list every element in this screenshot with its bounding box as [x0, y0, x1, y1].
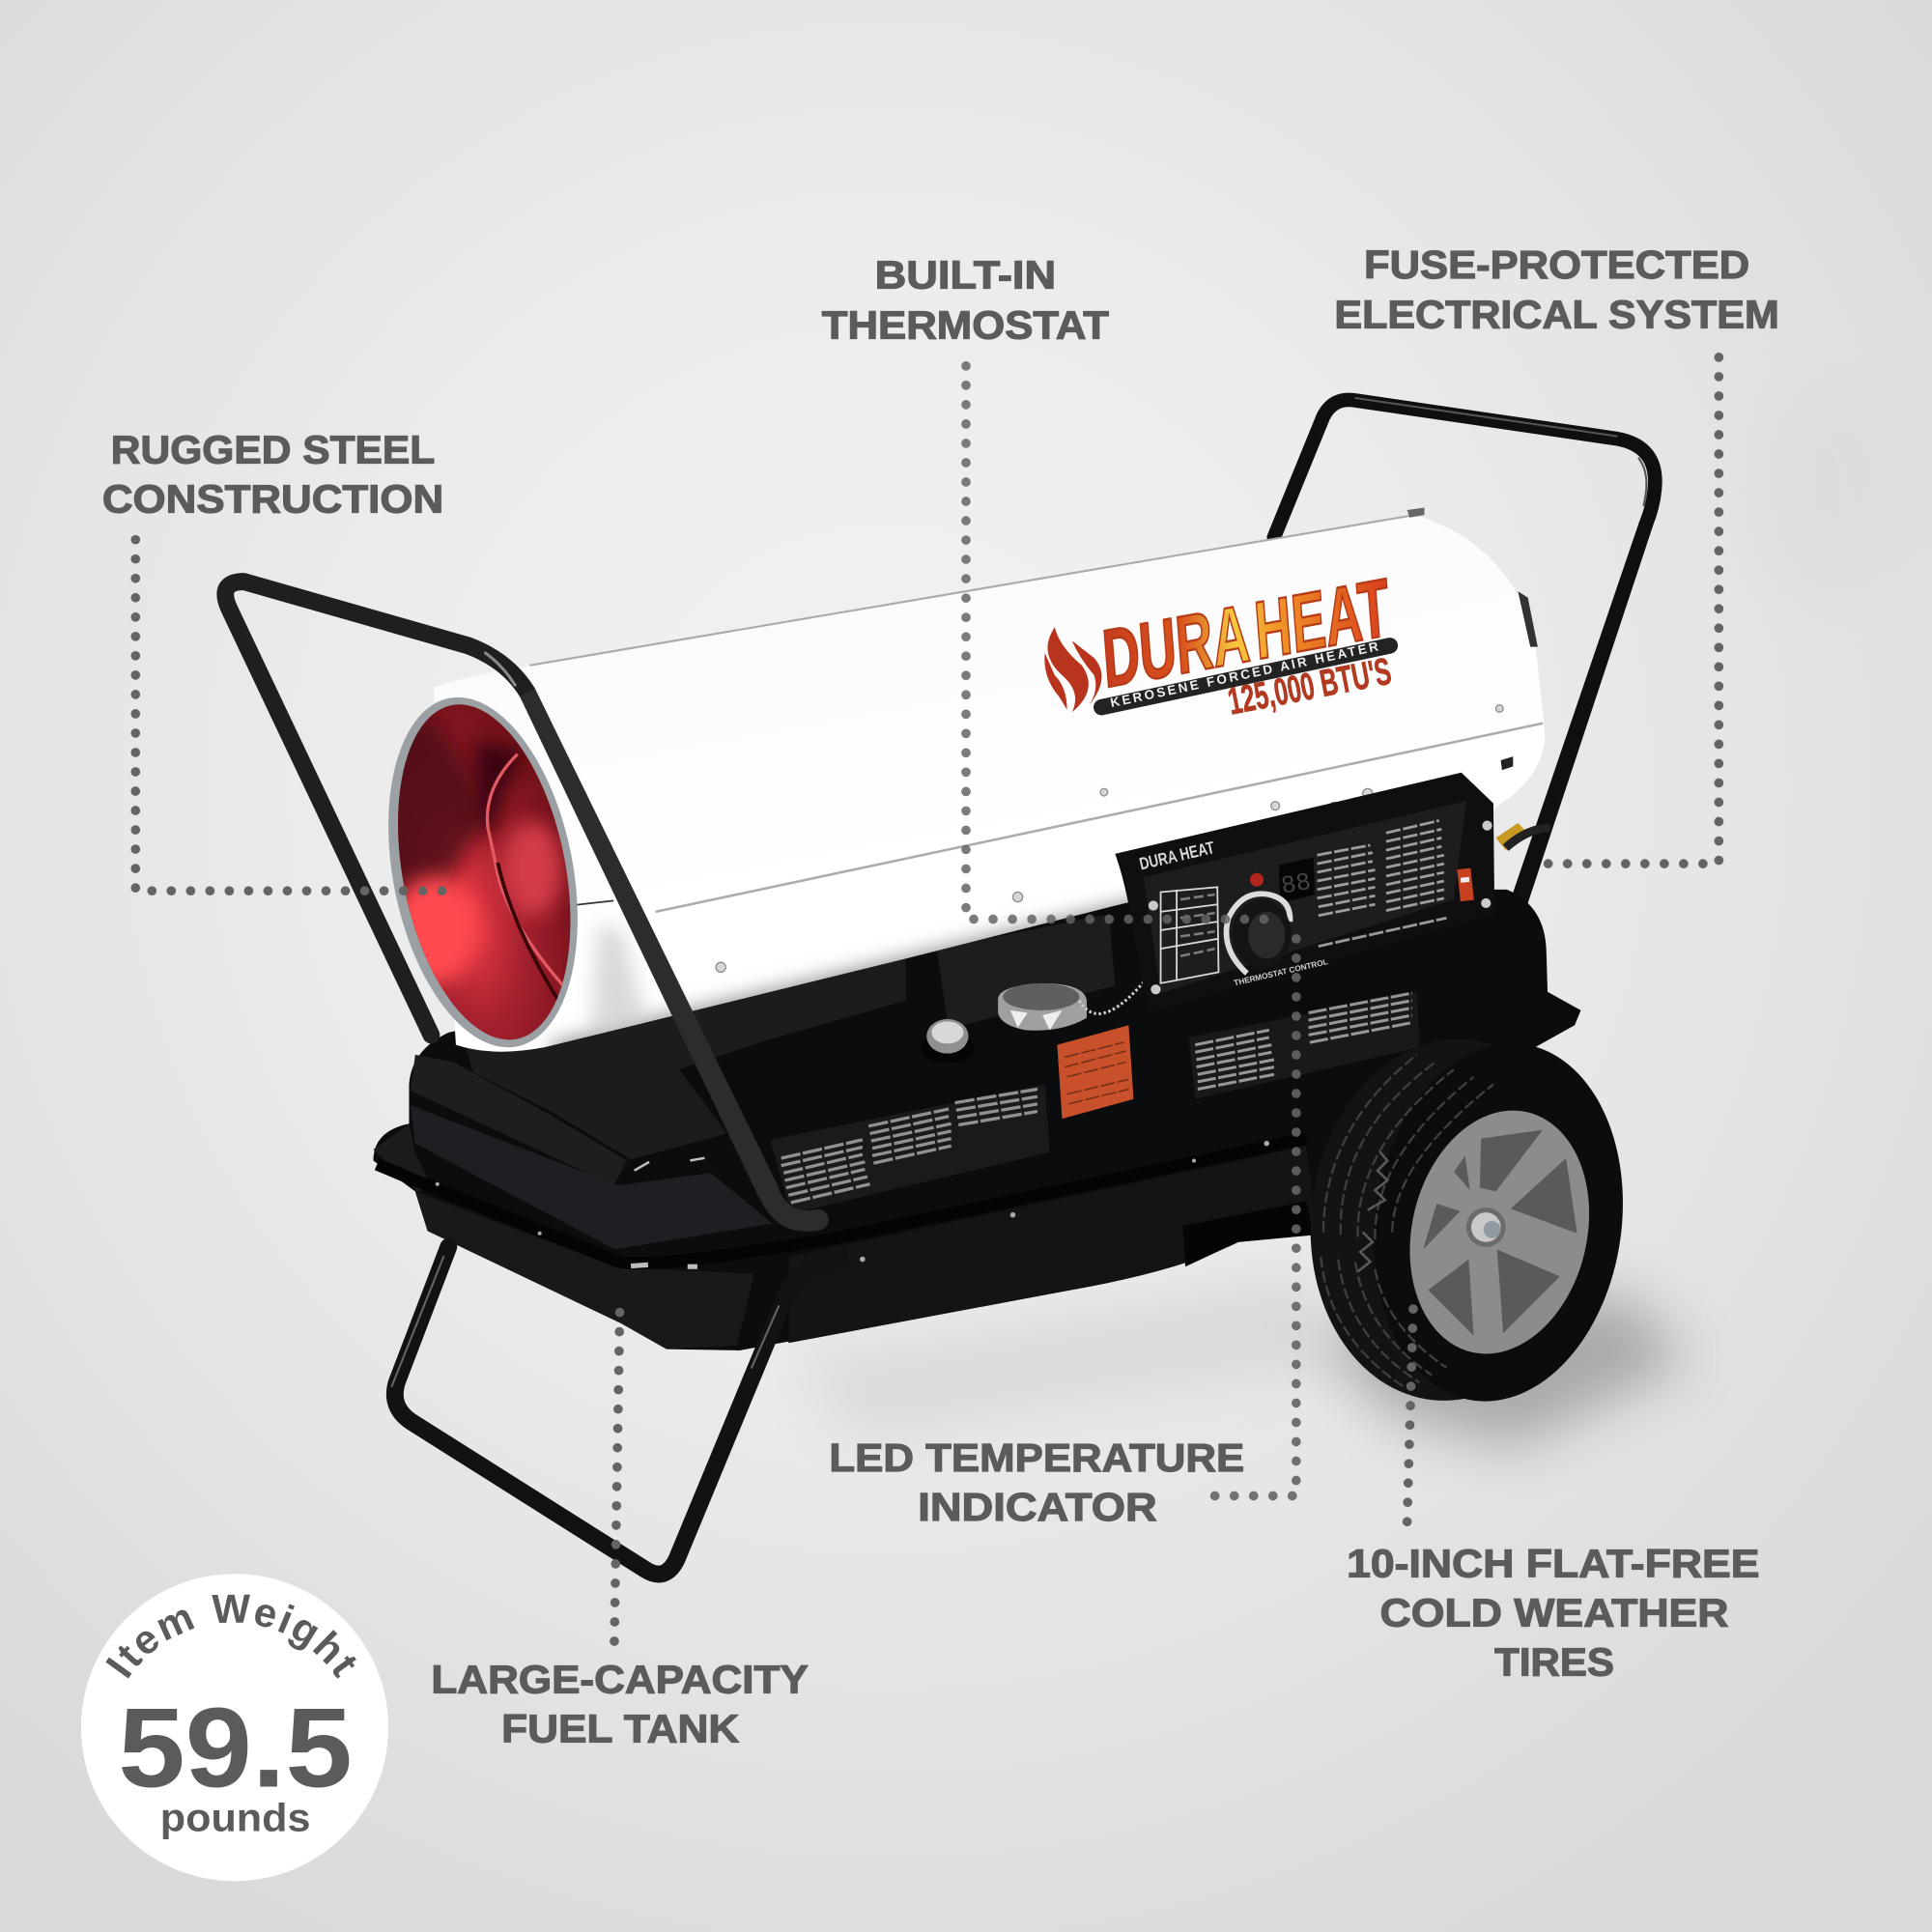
panel chart table: [1161, 887, 1218, 983]
tray rim: [377, 1139, 1306, 1264]
label: rugged steel construction: RUGGED STEEL: [111, 428, 435, 472]
hull recess: [1182, 1202, 1314, 1266]
rear vent slot: [1501, 756, 1513, 770]
yellow plug: [1495, 823, 1525, 850]
tire tread: [1293, 1025, 1610, 1414]
panel logo: DURA HEAT: [1138, 838, 1216, 873]
tank front face: [411, 1105, 773, 1249]
cap chain: [1079, 980, 1146, 1013]
rim openings: [1423, 1130, 1577, 1336]
rim disc: [1386, 1093, 1612, 1372]
dotted leader: rugged steel construction: [135, 540, 443, 891]
right side highlight: [502, 822, 562, 916]
label: flat-free tires: [1347, 1542, 1759, 1685]
heater body shell: [434, 508, 1545, 1062]
folding stand: [392, 1247, 840, 1575]
panel bolts: [1149, 820, 1492, 994]
label: fuse-protected electrical system: ELECTRICAL SYSTEM: [1334, 292, 1779, 336]
fuel tank: [373, 887, 1580, 1350]
baffle edge: [485, 753, 562, 986]
rear handle: [1274, 398, 1655, 1030]
tire sidewall: [1351, 1027, 1645, 1417]
power cord: [1506, 828, 1550, 848]
label: flat-free tires: COLD WEATHER: [1380, 1591, 1729, 1635]
interior shadow: [398, 713, 488, 952]
Dura Heat logo: [1044, 561, 1395, 724]
logo BTU rating: 125,000 BTU'S: [1225, 650, 1395, 724]
panel face: [1144, 801, 1466, 993]
label: rugged steel construction: CONSTRUCTION: [102, 477, 443, 522]
floor and wall shadows: [788, 382, 1897, 1448]
orange warning label: [1057, 1025, 1133, 1119]
French instruction label: [1189, 992, 1419, 1099]
label: LED temperature indicator: [829, 1435, 1244, 1529]
fuel cap: [998, 983, 1087, 1031]
label: flat-free tires: TIRES: [1494, 1640, 1614, 1685]
item weight badge: [81, 1574, 388, 1882]
label: built-in thermostat: [822, 252, 1109, 348]
dotted leader: fuse-protected electrical system: [1518, 357, 1719, 864]
LED display: [1279, 858, 1315, 903]
tank hood gloss band: [411, 1055, 627, 1185]
weight unit: pounds: [160, 1795, 310, 1839]
logo band: [1101, 645, 1390, 707]
rim highlights: [631, 1156, 705, 1269]
screws: [716, 705, 1503, 972]
tread zigzag: [1358, 1152, 1387, 1271]
tank silhouette: [373, 887, 1580, 1350]
mid grey panel by shoulder: [936, 914, 1115, 1029]
tank top surface: [461, 949, 906, 1159]
dotted leader: flat-free tires: [1407, 1306, 1413, 1521]
wheel: [1293, 1025, 1645, 1417]
logo tagline: KEROSENE FORCED AIR HEATER: [1109, 639, 1379, 710]
label: flat-free tires: 10-INCH FLAT-FREE: [1347, 1542, 1759, 1586]
hull underside right: [788, 1146, 1319, 1343]
heater outlet with red interior: [388, 697, 578, 1047]
curved heading: Item Weight: [105, 1594, 356, 1679]
top rear clip: [1407, 508, 1424, 518]
label: built-in thermostat: BUILT-IN: [875, 252, 1056, 297]
thermostat caption: THERMOSTAT CONTROL: [1233, 956, 1328, 987]
label: built-in thermostat: THERMOSTAT: [822, 303, 1109, 348]
hub: [1466, 1208, 1506, 1247]
label: LED temperature indicator: LED TEMPERATURE: [829, 1435, 1244, 1480]
tray lower hull: [415, 1191, 754, 1350]
upper dark baffle: [474, 739, 524, 838]
lower left glow: [389, 876, 478, 984]
label: fuse-protected electrical system: [1334, 242, 1779, 336]
power switch: [1457, 868, 1474, 901]
rear right bracket: [1518, 591, 1538, 647]
dotted leader: LED temperature indicator: [1215, 936, 1296, 1495]
red indicator light: [1250, 873, 1264, 887]
logo flame: [1044, 627, 1101, 712]
label: fuse-protected electrical system: FUSE-PROTECTED: [1364, 242, 1749, 287]
label: large-capacity fuel tank: LARGE-CAPACITY: [431, 1658, 809, 1702]
label: large-capacity fuel tank: [431, 1658, 809, 1751]
Spanish instruction label: [770, 1084, 1050, 1213]
tread pattern: [1321, 1055, 1493, 1387]
label: large-capacity fuel tank: FUEL TANK: [501, 1707, 740, 1751]
shell seam: [656, 724, 1543, 912]
logo wordmark: DURA HEAT: [1099, 561, 1393, 705]
dotted leader: large-capacity fuel tank: [614, 1309, 620, 1641]
seam crack near rim: [569, 900, 613, 906]
tray flange: [373, 1123, 431, 1193]
front handle frame: [225, 582, 818, 1221]
dotted leader: built-in thermostat: [966, 366, 1282, 920]
weight value: 59.5: [118, 1684, 353, 1810]
control panel: [1115, 773, 1550, 1012]
tray screws: [436, 1141, 1269, 1262]
label: rugged steel construction: [102, 428, 443, 522]
tube highlight: [486, 653, 515, 685]
fuel gauge: [921, 1019, 975, 1064]
panel instructions: [1318, 820, 1446, 947]
underside shading: [540, 889, 1128, 1047]
label: LED temperature indicator: INDICATOR: [918, 1485, 1157, 1529]
LED display: 88: [1279, 868, 1313, 901]
thermostat dial: [1227, 894, 1292, 974]
top edge line: [529, 515, 1414, 666]
badge circle: [81, 1574, 388, 1881]
